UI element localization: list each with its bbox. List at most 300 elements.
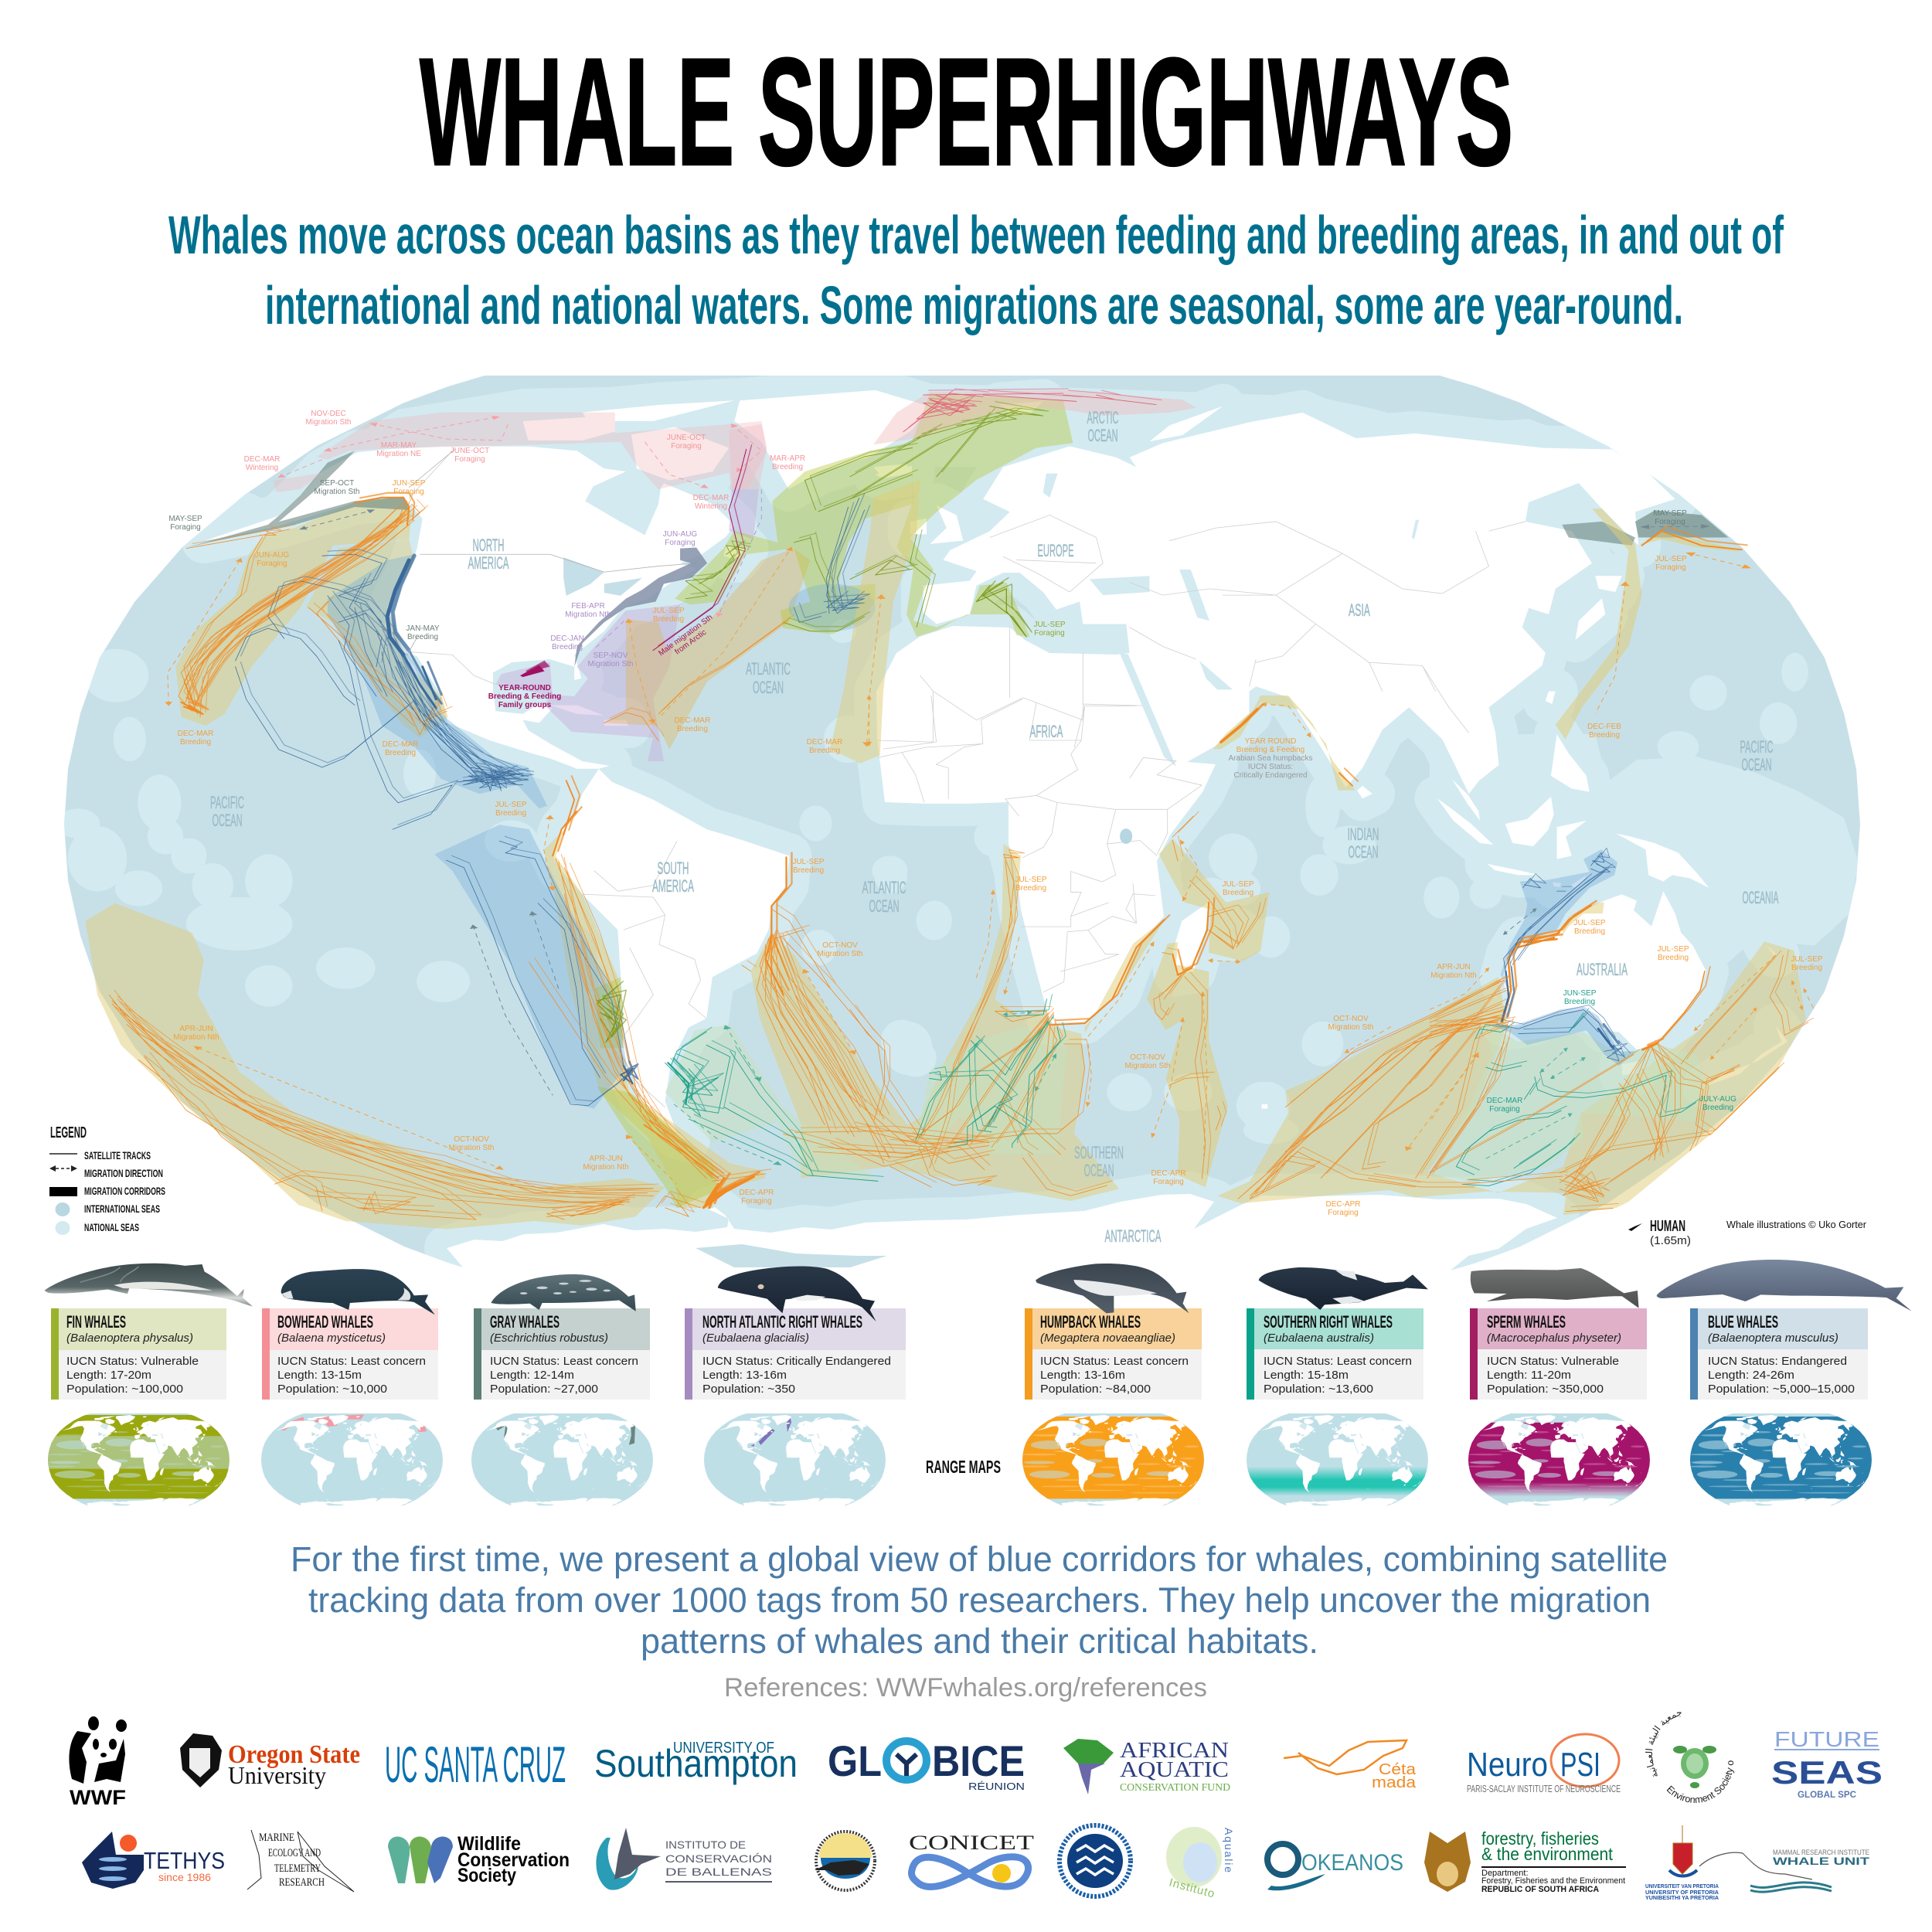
logo: Mammal Research Institute Whale Unit: [1699, 1849, 1870, 1892]
logo: Instituto Aqualie: Instituto: [1168, 1876, 1216, 1900]
seasonal labels: Foraging: [454, 455, 485, 464]
track: humpback Chile to Antarctic core: [553, 811, 718, 1179]
corridor: bowhead Svalbard: [873, 390, 1196, 444]
logo: NeuroPSI: PSI: [1560, 1746, 1600, 1784]
logo: Instituto de Conservacion de Ballenas: INSTITUTO DE: [665, 1838, 746, 1851]
seasonal labels: OCT-NOV: [1130, 1053, 1165, 1062]
logo: WWF: [69, 1716, 127, 1809]
corridor: blue whale Azores: [788, 584, 876, 631]
corridor: gray whale Okhotsk: [1562, 522, 1635, 546]
track: blue whale Gulf of California: [403, 655, 436, 708]
corridor: humpback Madagascar east: [1159, 838, 1269, 961]
whale: blue: [1657, 1260, 1912, 1311]
seasonal labels: Migration Nth: [1430, 971, 1477, 980]
logo: CONICET: CONICET: [909, 1832, 1034, 1854]
logo: University of Pretoria: [1645, 1825, 1719, 1901]
seasonal labels: DEC-FEB: [1587, 723, 1621, 731]
ocean and continent labels: OCEAN: [212, 811, 243, 830]
tracks: blue whale Pacific: [236, 554, 529, 829]
card: humpback whale: Length: 13-16m: [1040, 1369, 1125, 1382]
seasonal labels: [168, 410, 1823, 1217]
logo: Environment Society of Oman: Environment Society of Oman: [1666, 1760, 1734, 1804]
tracks: humpback South Pacific: [109, 995, 653, 1219]
seasonal labels: Breeding: [1658, 954, 1689, 962]
legend: migration corridors: [49, 1185, 165, 1197]
seasonal labels: APR-JUN: [589, 1155, 623, 1163]
tracks: humpback Indian Ocean: [1238, 980, 1510, 1199]
logo: CONICET: [909, 1832, 1034, 1887]
tracks: humpback Tasman and Southern Ocean: [1430, 955, 1808, 1212]
legend: international seas: INTERNATIONAL SEAS: [84, 1202, 160, 1215]
seasonal labels: Foraging: [170, 523, 201, 532]
track: humpback Alaska coast: [181, 498, 409, 714]
card: north Atlantic right whale: Length: 13-16m: [702, 1369, 787, 1382]
tracks: humpback South Atlantic: [742, 909, 989, 1187]
logo: Cetamada: Céta: [1379, 1761, 1417, 1778]
seasonal labels: JUL-SEP: [792, 858, 825, 866]
seasonal labels: Breeding: [809, 747, 840, 755]
track: right whale male migration: [653, 449, 747, 651]
seasonal labels: Foraging: [1489, 1105, 1520, 1114]
seasonal labels: Breeding: [552, 643, 583, 651]
seasonal labels: DEC-APR: [739, 1189, 774, 1197]
seasonal labels: Breeding: [1791, 964, 1822, 972]
seasonal labels: YEAR-ROUND: [498, 684, 551, 692]
card: gray whale: IUCN Status: Least concern: [490, 1355, 638, 1368]
logo: Environment Society of Oman: جمعية البيئة العمانية: [1645, 1713, 1682, 1777]
seasonal labels: DEC-MAR: [244, 455, 280, 464]
logo: University of Southampton: Southampton: [594, 1742, 798, 1785]
ocean and continent labels: AFRICA: [1029, 722, 1063, 741]
card: sperm whale: Length: 11-20m: [1487, 1369, 1571, 1382]
card: bowhead whale: [262, 1308, 438, 1400]
corridor: gray whale: [184, 451, 409, 549]
seasonal labels: NOV-DEC: [311, 410, 346, 418]
card: humpback whale: [1025, 1308, 1202, 1400]
logo: Globice Reunion: RÉUNION: [968, 1781, 1025, 1792]
logo: Wildlife Conservation Society: Wildlife: [457, 1833, 521, 1855]
panel: bowhead whale: [261, 1269, 443, 1508]
logo: Department of Forestry, Fisheries and the Environment: Department:: [1481, 1869, 1529, 1878]
card: sperm whale: (Macrocephalus physeter): [1487, 1332, 1621, 1345]
track: humpback Western Australia: [1502, 906, 1591, 1022]
logo: Future Seas: SEAS: [1771, 1754, 1883, 1791]
logo: Oregon State University: [180, 1733, 360, 1789]
human scale: (1.65m): [1650, 1234, 1691, 1247]
legend: satellite tracks: SATELLITE TRACKS: [84, 1149, 151, 1162]
panel: world map: OCEANIA: [1742, 888, 1779, 907]
logo: Future Seas: GLOBAL SPC: [1798, 1789, 1856, 1800]
logo: Department of Forestry, Fisheries and the Environment: & the environment: [1481, 1844, 1614, 1864]
track: fin whale Chile: [597, 986, 621, 1043]
card: fin whale: IUCN Status: Vulnerable: [66, 1355, 199, 1368]
legend: migration direction: [49, 1165, 163, 1179]
logo: NeuroPSI: [1467, 1734, 1621, 1794]
seasonal labels: JUN-SEP: [393, 479, 426, 488]
human scale: HUMAN: [1650, 1218, 1685, 1235]
ocean and continent labels: ASIA: [1349, 600, 1370, 620]
whale: southern right: [1259, 1267, 1428, 1310]
seasonal labels: JAN-MAY: [406, 624, 440, 633]
corridor: humpback Aleutians: [1638, 531, 1742, 551]
seasonal labels: DEC-APR: [1151, 1169, 1186, 1178]
tracks: southern right South America: [665, 1032, 878, 1181]
card: bowhead whale: IUCN Status: Least concern: [277, 1355, 426, 1368]
seasonal labels: Breeding: [1574, 927, 1605, 936]
logo: Marine Ecology and Telemetry Research: MARINE: [259, 1832, 294, 1844]
tracks: fin whale Svalbard and Iceland: [850, 406, 1043, 628]
seasonal labels: Family groups: [498, 701, 552, 709]
card: bowhead whale: BOWHEAD WHALES: [277, 1312, 373, 1332]
whale: north Atlantic right: [718, 1266, 876, 1321]
seasonal labels: DEC-MAR: [693, 494, 729, 502]
whale: humpback: [1036, 1264, 1189, 1313]
card: bowhead whale: Population: ~10,000: [277, 1383, 387, 1396]
seasonal labels: Breeding: [385, 749, 416, 757]
seasonal labels: JUL-SEP: [1573, 919, 1606, 927]
logo: African Aquatic Conservation Fund: AQUATIC: [1120, 1757, 1229, 1782]
satellite tracks: [109, 389, 1814, 1219]
corridor: north Atlantic right whale: [495, 489, 759, 761]
track: blue whale South Australia core: [1598, 1029, 1613, 1048]
card: north Atlantic right whale: IUCN Status: Critically Endangered: [702, 1355, 891, 1368]
track: blue whale Western Australia core: [1502, 971, 1509, 1021]
legend: migration direction: MIGRATION DIRECTION: [84, 1167, 163, 1179]
seasonal labels: JUL-SEP: [495, 801, 527, 809]
logo: Wildlife Conservation Society: Society: [457, 1865, 516, 1886]
card: blue whale: (Balaenoptera musculus): [1708, 1332, 1838, 1345]
logo: Okeanos: OKEANOS: [1301, 1850, 1403, 1876]
seasonal labels: Migration Sth: [588, 660, 633, 668]
seasonal labels: JUL-SEP: [1791, 955, 1823, 964]
track: humpback Ecuador coast: [563, 781, 574, 835]
icon: human silhouette: [1628, 1223, 1642, 1231]
seasonal labels: Breeding: [407, 633, 438, 641]
card: blue whale: BLUE WHALES: [1708, 1312, 1778, 1332]
seasonal labels: Foraging: [1655, 563, 1686, 572]
whale: gray: [491, 1274, 636, 1311]
ocean and continent labels: OCEAN: [869, 896, 900, 916]
corridor: humpback South Atlantic: [751, 933, 920, 1179]
whale: sperm: [1471, 1268, 1639, 1308]
range map: sperm whale: [1462, 1413, 1657, 1508]
additional satellite tracks: [114, 389, 1814, 1215]
summary paragraph: [291, 1539, 1668, 1661]
ocean and continent labels: AMERICA: [468, 553, 509, 573]
seasonal labels: Foraging: [741, 1197, 772, 1206]
panel: fin whale: [42, 1264, 253, 1508]
card: southern right whale: [1247, 1308, 1423, 1400]
card: southern right whale: IUCN Status: Least concern: [1264, 1355, 1412, 1368]
logo: WWF: WWF: [70, 1786, 126, 1809]
track: humpback Bass Strait: [1643, 1043, 1658, 1049]
corridor: southern right Southern Africa: [907, 1027, 1067, 1172]
seasonal labels: Foraging: [393, 488, 424, 496]
seasonal labels: FEB-APR: [571, 602, 605, 611]
legend: international seas: [56, 1202, 160, 1216]
seasonal labels: Foraging: [1328, 1209, 1359, 1217]
card: blue whale: [1690, 1308, 1868, 1400]
seasonal labels: MAR-APR: [770, 454, 805, 463]
logo: Wildlife Conservation Society: [388, 1833, 570, 1886]
seasonal labels: YEAR ROUND: [1245, 737, 1296, 746]
seasonal labels: Breeding: [1564, 998, 1595, 1006]
seasonal labels: Foraging: [671, 442, 702, 451]
tracks: humpback Chile: [529, 859, 724, 1181]
logo: Marine Ecology and Telemetry Research: RESEARCH: [279, 1876, 325, 1889]
track: fin whale Mediterranean: [977, 583, 1026, 637]
logo: Department of Forestry, Fisheries and the Environment: forestry, fisheries: [1481, 1828, 1599, 1849]
track: humpback Madagascar coast: [1172, 903, 1209, 975]
corridor: right whale foraging: [574, 547, 707, 667]
card: north Atlantic right whale: NORTH ATLANTIC RIGHT WHALES: [702, 1312, 862, 1332]
subtitle: [168, 205, 1784, 335]
legend: satellite tracks: [49, 1149, 151, 1162]
seasonal labels: Arabian Sea humpbacks: [1229, 754, 1312, 763]
track: humpback South Africa coast: [1050, 920, 1164, 1025]
panel: southern right whale: [1240, 1267, 1435, 1508]
range map: fin whale: [42, 1413, 236, 1508]
panel: gray whale: [471, 1274, 653, 1508]
corridor: humpback North Pacific: [175, 497, 412, 726]
seasonal labels: Migration Sth: [306, 418, 351, 427]
corridor: humpback Chile: [544, 829, 766, 1208]
corridor: humpback north-west Australia: [1560, 903, 1604, 939]
logo: Oregon State University: Oregon State: [228, 1740, 360, 1769]
seasonal labels: OCT-NOV: [822, 941, 858, 950]
seasonal labels: JUN-SEP: [1563, 989, 1597, 998]
card: southern right whale: (Eubalaena australis): [1264, 1332, 1374, 1345]
illustration credit: Whale illustrations © Uko Gorter: [1726, 1219, 1867, 1230]
corridor: blue whale Eastern Pacific: [328, 554, 547, 808]
tracks: blue whale North Atlantic: [794, 498, 865, 622]
tracks: fin whale North Atlantic: [685, 448, 912, 631]
country borders: [409, 451, 1526, 1107]
legend: national seas: NATIONAL SEAS: [84, 1221, 139, 1233]
card: sperm whale: [1470, 1308, 1647, 1400]
logo: Globice Reunion: BICE: [932, 1736, 1025, 1785]
range map: north Atlantic right whale: [704, 1413, 886, 1508]
seasonal labels: IUCN Status:: [1248, 763, 1293, 771]
seasonal labels: Migration Nth: [173, 1033, 219, 1042]
card: humpback whale: Population: ~84,000: [1040, 1383, 1151, 1396]
references: References: WWFwhales.org/references: [724, 1673, 1207, 1702]
ocean and continent labels: EUROPE: [1037, 541, 1074, 560]
human scale: [1628, 1218, 1691, 1247]
seasonal labels: JUNE-OCT: [667, 434, 706, 442]
logo: Marine Ecology and Telemetry Research: ECOLOGY AND: [268, 1847, 321, 1859]
tracks: blue whale Chile: [446, 841, 630, 1106]
ocean and continent labels: ATLANTIC: [746, 659, 791, 679]
tracks: humpback Madagascar: [1154, 816, 1260, 1179]
seasonal labels: APR-JUN: [179, 1025, 213, 1033]
logo: Instituto de Conservacion de Ballenas: CONSERVACIÓN: [665, 1852, 772, 1865]
seasonal labels: DEC-MAR: [1487, 1097, 1522, 1105]
corridor: humpback Mozambique: [1085, 918, 1165, 1033]
seasonal labels: Breeding: [180, 738, 211, 747]
corridor: fin whale Greenland to Europe: [896, 393, 1073, 637]
seasonal labels: JUL-SEP: [1033, 621, 1066, 629]
corridor: humpback South Pacific: [86, 903, 665, 1229]
card: gray whale: GRAY WHALES: [490, 1312, 560, 1332]
seasonal labels: JUL-SEP: [652, 607, 685, 615]
seasonal labels: JUN-AUG: [663, 530, 697, 539]
seasonal labels: APR-JUN: [1437, 963, 1471, 971]
logo: University of Pretoria: UNIVERSITEIT VAN PRETORIA: [1645, 1883, 1719, 1889]
seasonal labels: DEC-JAN: [550, 634, 584, 643]
tracks: humpback Antarctic Peninsula: [656, 1174, 766, 1216]
tracks: southern right Australia: [1456, 1013, 1696, 1185]
card: southern right whale: SOUTHERN RIGHT WHALES: [1264, 1312, 1393, 1332]
ocean and continent labels: OCEAN: [1742, 755, 1771, 774]
card: humpback whale: IUCN Status: Least concern: [1040, 1355, 1189, 1368]
ocean and continent labels: PACIFIC: [1740, 737, 1774, 757]
seasonal labels: Breeding: [653, 615, 684, 624]
ocean and continent labels: INDIAN: [1348, 825, 1379, 844]
pointer lines: [406, 449, 455, 656]
seasonal labels: MAY-SEP: [168, 515, 202, 523]
logo: Okeanos: [1267, 1844, 1403, 1890]
range map: gray whale: [471, 1413, 653, 1508]
ocean and continent labels: OCEAN: [753, 678, 784, 697]
seasonal labels: Breeding: [677, 725, 708, 733]
seasonal labels: JULY-AUG: [1699, 1095, 1736, 1104]
card: bowhead whale: Length: 13-15m: [277, 1369, 362, 1382]
logo: Marine Ecology and Telemetry Research: TELEMETRY: [274, 1862, 321, 1875]
logo: Future Seas: FUTURE: [1774, 1727, 1879, 1751]
card: north Atlantic right whale: (Eubalaena glacialis): [702, 1332, 809, 1345]
national seas: [56, 380, 1859, 1287]
corridor: southern right Australia: [1430, 1024, 1705, 1182]
ocean and continent labels: ANTARCTICA: [1105, 1226, 1162, 1246]
ocean and continent labels: PACIFIC: [210, 793, 244, 812]
card: fin whale: Population: ~100,000: [66, 1383, 183, 1396]
seasonal labels: JUL-SEP: [1655, 555, 1687, 563]
ocean and continent labels: ATLANTIC: [862, 878, 906, 897]
card: sperm whale: Population: ~350,000: [1487, 1383, 1604, 1396]
card: fin whale: [51, 1308, 226, 1400]
seasonal labels: Migration Sth: [315, 488, 359, 496]
card: humpback whale: (Megaptera novaeangliae): [1040, 1332, 1175, 1345]
card: gray whale: [474, 1308, 650, 1400]
track: humpback Antarctic Peninsula knot: [703, 1177, 753, 1208]
logo: African Aquatic Conservation Fund: [1063, 1738, 1230, 1794]
card: sperm whale: IUCN Status: Vulnerable: [1487, 1355, 1619, 1368]
whale: fin: [44, 1264, 253, 1307]
seasonal labels: Migration Nth: [583, 1163, 629, 1172]
logo: African Aquatic Conservation Fund: AFRICAN: [1120, 1738, 1229, 1763]
ocean and continent labels: AMERICA: [652, 876, 694, 896]
card: fin whale: Length: 17-20m: [66, 1369, 151, 1382]
logo: Cetamada: mada: [1372, 1774, 1417, 1791]
summary paragraph: tracking data from over 1000 tags from 50 researchers. They help uncover the migration: [308, 1580, 1651, 1620]
range map: bowhead whale: [261, 1413, 443, 1508]
track: humpback Oman coast: [1221, 709, 1257, 742]
corridor: blue whale South-East Pacific: [434, 825, 627, 1109]
tracks: southern right Southern Africa: [916, 999, 1060, 1148]
card: north Atlantic right whale: Population: ~350: [702, 1383, 795, 1396]
legend: migration corridors: MIGRATION CORRIDORS: [84, 1185, 165, 1197]
card: gray whale: (Eschrichtius robustus): [490, 1332, 608, 1345]
seasonal labels: Breeding: [1223, 889, 1253, 897]
seasonal labels: JUL-SEP: [1015, 876, 1047, 884]
seasonal labels: MAY-SEP: [1653, 509, 1687, 518]
seasonal labels: JUN-AUG: [255, 551, 289, 560]
logo: Tethys: TETHYS: [144, 1847, 225, 1874]
logo: Instituto Aqualie: Aqualie: [1223, 1828, 1235, 1872]
panel: north Atlantic right whale: [685, 1266, 906, 1508]
track: humpback Eastern Australia: [1658, 971, 1705, 1043]
card: fin whale: FIN WHALES: [66, 1312, 126, 1332]
legend: national seas: [56, 1221, 139, 1235]
corridor: humpback North Atlantic: [604, 549, 810, 750]
seasonal labels: DEC-APR: [1325, 1200, 1361, 1209]
logo: Programa de Monitoreo Ballena Franca Austral: [815, 1832, 875, 1890]
seasonal labels: DEC-MAR: [807, 738, 842, 747]
ocean and continent labels: OCEAN: [1083, 1161, 1114, 1180]
seasonal labels: Foraging: [1153, 1178, 1184, 1186]
corridor: blue whale Australia north-west: [1501, 849, 1617, 987]
panel: world map: [56, 376, 1860, 1287]
range maps label: RANGE MAPS: [926, 1457, 1001, 1477]
seasonal labels: Migration Sth: [449, 1144, 494, 1152]
tracks: humpback Atlantic: [604, 619, 788, 740]
logo: Globice Reunion: GL: [828, 1736, 882, 1785]
card: humpback whale: HUMPBACK WHALES: [1040, 1312, 1141, 1332]
seasonal labels: Critically Endangered: [1233, 771, 1308, 780]
tracks: bowhead Svalbard: [903, 393, 1156, 432]
corridor: bowhead Arctic America: [274, 413, 767, 492]
corridor: humpback Madagascar west: [1147, 942, 1228, 1187]
logo: Marine Ecology and Telemetry Research: [247, 1830, 354, 1892]
logo: Instituto de Conservacion de Ballenas: DE BALLENAS: [665, 1866, 772, 1878]
logo: Oregon State University: University: [228, 1761, 326, 1789]
seasonal labels: Foraging: [665, 539, 696, 547]
track: blue whale California core: [387, 560, 409, 655]
corridor: southern right South America: [665, 1025, 878, 1181]
migration direction arrows: [168, 417, 1815, 1184]
logo: Department of Forestry, Fisheries and the Environment: REPUBLIC OF SOUTH AFRICA: [1481, 1885, 1599, 1894]
seasonal labels: Foraging: [257, 560, 287, 568]
seasonal labels: DEC-MAR: [675, 716, 710, 725]
whale: bowhead: [281, 1269, 435, 1315]
logo: African Aquatic Conservation Fund: CONSERVATION FUND: [1120, 1782, 1230, 1794]
corridor: humpback Australia and Southern Ocean: [1217, 941, 1806, 1215]
seasonal labels: Wintering: [246, 464, 278, 472]
seasonal labels: Migration Sth: [818, 950, 862, 958]
corridor: humpback Eastern Atlantic: [830, 480, 920, 764]
seasonal labels: Wintering: [695, 502, 727, 511]
panel: blue whale: [1657, 1260, 1912, 1508]
ocean and continent labels: [210, 408, 1779, 1246]
seasonal labels: from Arctic: [673, 628, 708, 657]
logo: Tethys: since 1986: [158, 1871, 211, 1883]
legend title: LEGEND: [50, 1124, 87, 1141]
logo: NeuroPSI: PARIS-SACLAY INSTITUTE OF NEUROSCIENCE: [1467, 1783, 1621, 1794]
corridor: bowhead Baffin Bay: [729, 424, 767, 489]
card: gray whale: Length: 12-14m: [490, 1369, 574, 1382]
corridor: humpback Arabian Sea south: [1213, 696, 1355, 791]
tracks: humpback Hawaii to Alaska: [179, 501, 447, 735]
logo: Wildlife Conservation Society: Conservation: [457, 1849, 570, 1871]
card: blue whale: Length: 24-26m: [1708, 1369, 1794, 1382]
seasonal labels: Foraging: [1034, 629, 1065, 638]
logo: Instituto Aqualie: [1166, 1827, 1235, 1900]
seasonal labels: OCT-NOV: [454, 1135, 489, 1144]
range map: humpback whale: [1016, 1413, 1211, 1508]
tracks: blue whale Australia: [1496, 852, 1625, 1061]
seasonal labels: Breeding: [1589, 731, 1620, 740]
